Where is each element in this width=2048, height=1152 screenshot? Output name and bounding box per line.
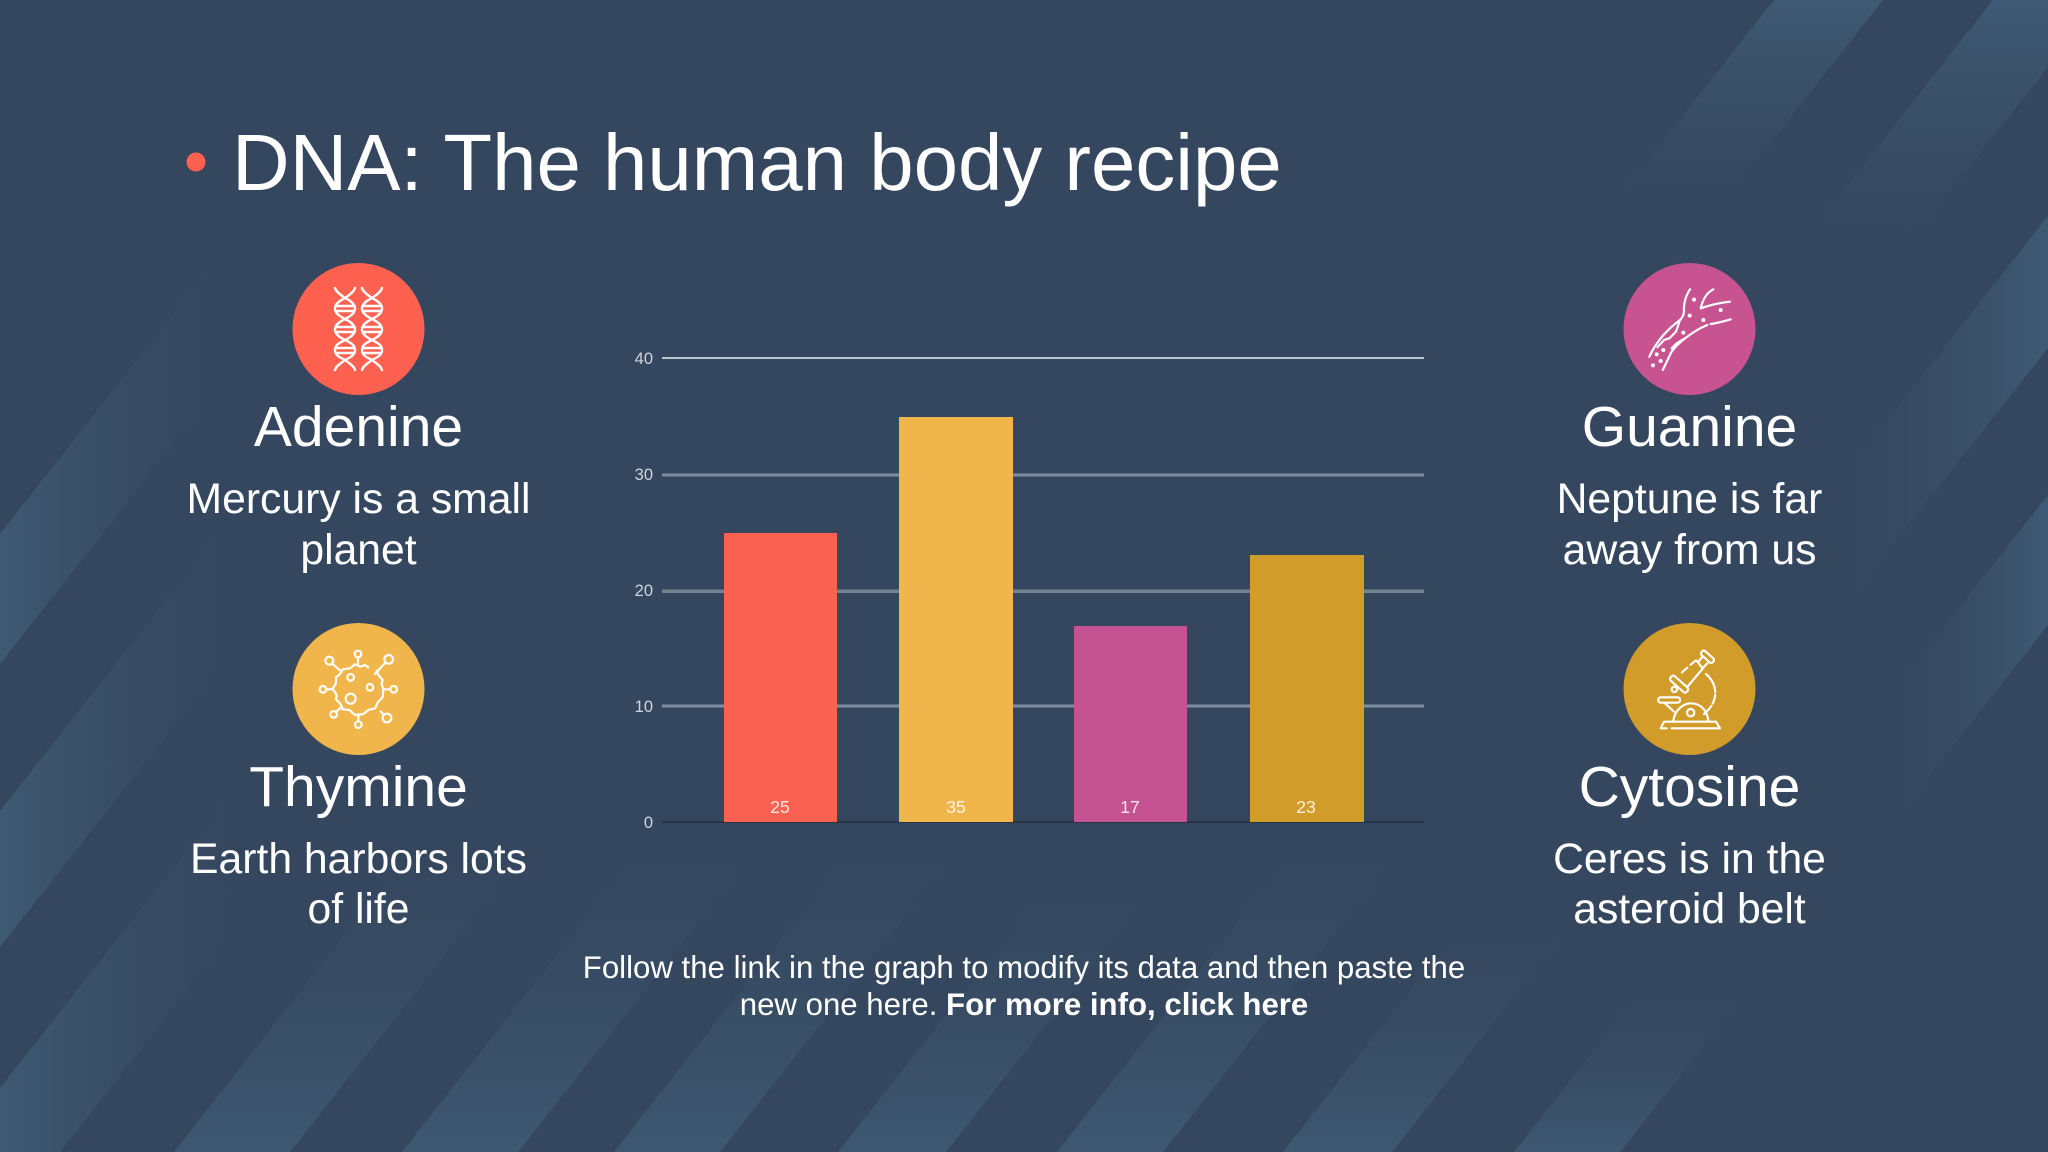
icon: blood vessel xyxy=(1624,263,1756,395)
description: Guanine: Neptune is far xyxy=(1557,475,1822,523)
bar: 23: 23 xyxy=(1296,797,1316,817)
bar chart xyxy=(635,350,1424,832)
description: Thymine: of life xyxy=(307,885,410,933)
gridlines xyxy=(662,357,1424,823)
description: Adenine: Mercury is a small xyxy=(187,475,530,523)
bar: 35: 35 xyxy=(946,797,966,817)
bar: 35 xyxy=(899,417,1013,822)
panel: adenine xyxy=(187,263,530,574)
footer note: new one here. xyxy=(740,987,946,1022)
heading: Guanine: Guanine xyxy=(1582,395,1797,459)
panel: guanine xyxy=(1557,263,1822,574)
y axis labels: 0 xyxy=(644,814,653,832)
title with bullet: DNA: The human body recipe xyxy=(232,118,1282,207)
description: Adenine: planet xyxy=(300,526,417,574)
icon: DNA helices xyxy=(292,263,424,395)
y axis labels: 20 xyxy=(635,582,653,600)
y axis labels: 10 xyxy=(635,698,653,716)
icon: virus xyxy=(292,623,424,755)
heading: Cytosine: Cytosine xyxy=(1579,755,1800,819)
bar: 25: 25 xyxy=(770,797,790,817)
y axis labels: 30 xyxy=(635,466,653,484)
bar: 17 xyxy=(1074,626,1187,822)
heading: Thymine: Thymine xyxy=(249,755,468,819)
panel: thymine xyxy=(190,623,527,933)
footer note: For more info, click here xyxy=(946,987,1308,1022)
bar: 23 xyxy=(1250,555,1364,822)
description: Cytosine: asteroid belt xyxy=(1573,885,1806,933)
description: Thymine: Earth harbors lots xyxy=(190,835,527,883)
footer note: Follow the link in the graph to modify its data and then paste the xyxy=(583,950,1465,985)
y axis labels: 40 xyxy=(635,350,653,368)
bar: 17: 17 xyxy=(1120,797,1140,817)
y axis labels xyxy=(635,350,653,832)
icon: microscope xyxy=(1624,623,1756,755)
bar: 25 xyxy=(724,533,837,822)
heading: Adenine: Adenine xyxy=(254,395,463,459)
description: Cytosine: Ceres is in the xyxy=(1553,835,1826,883)
description: Guanine: away from us xyxy=(1563,526,1816,574)
panel: cytosine xyxy=(1553,623,1826,933)
